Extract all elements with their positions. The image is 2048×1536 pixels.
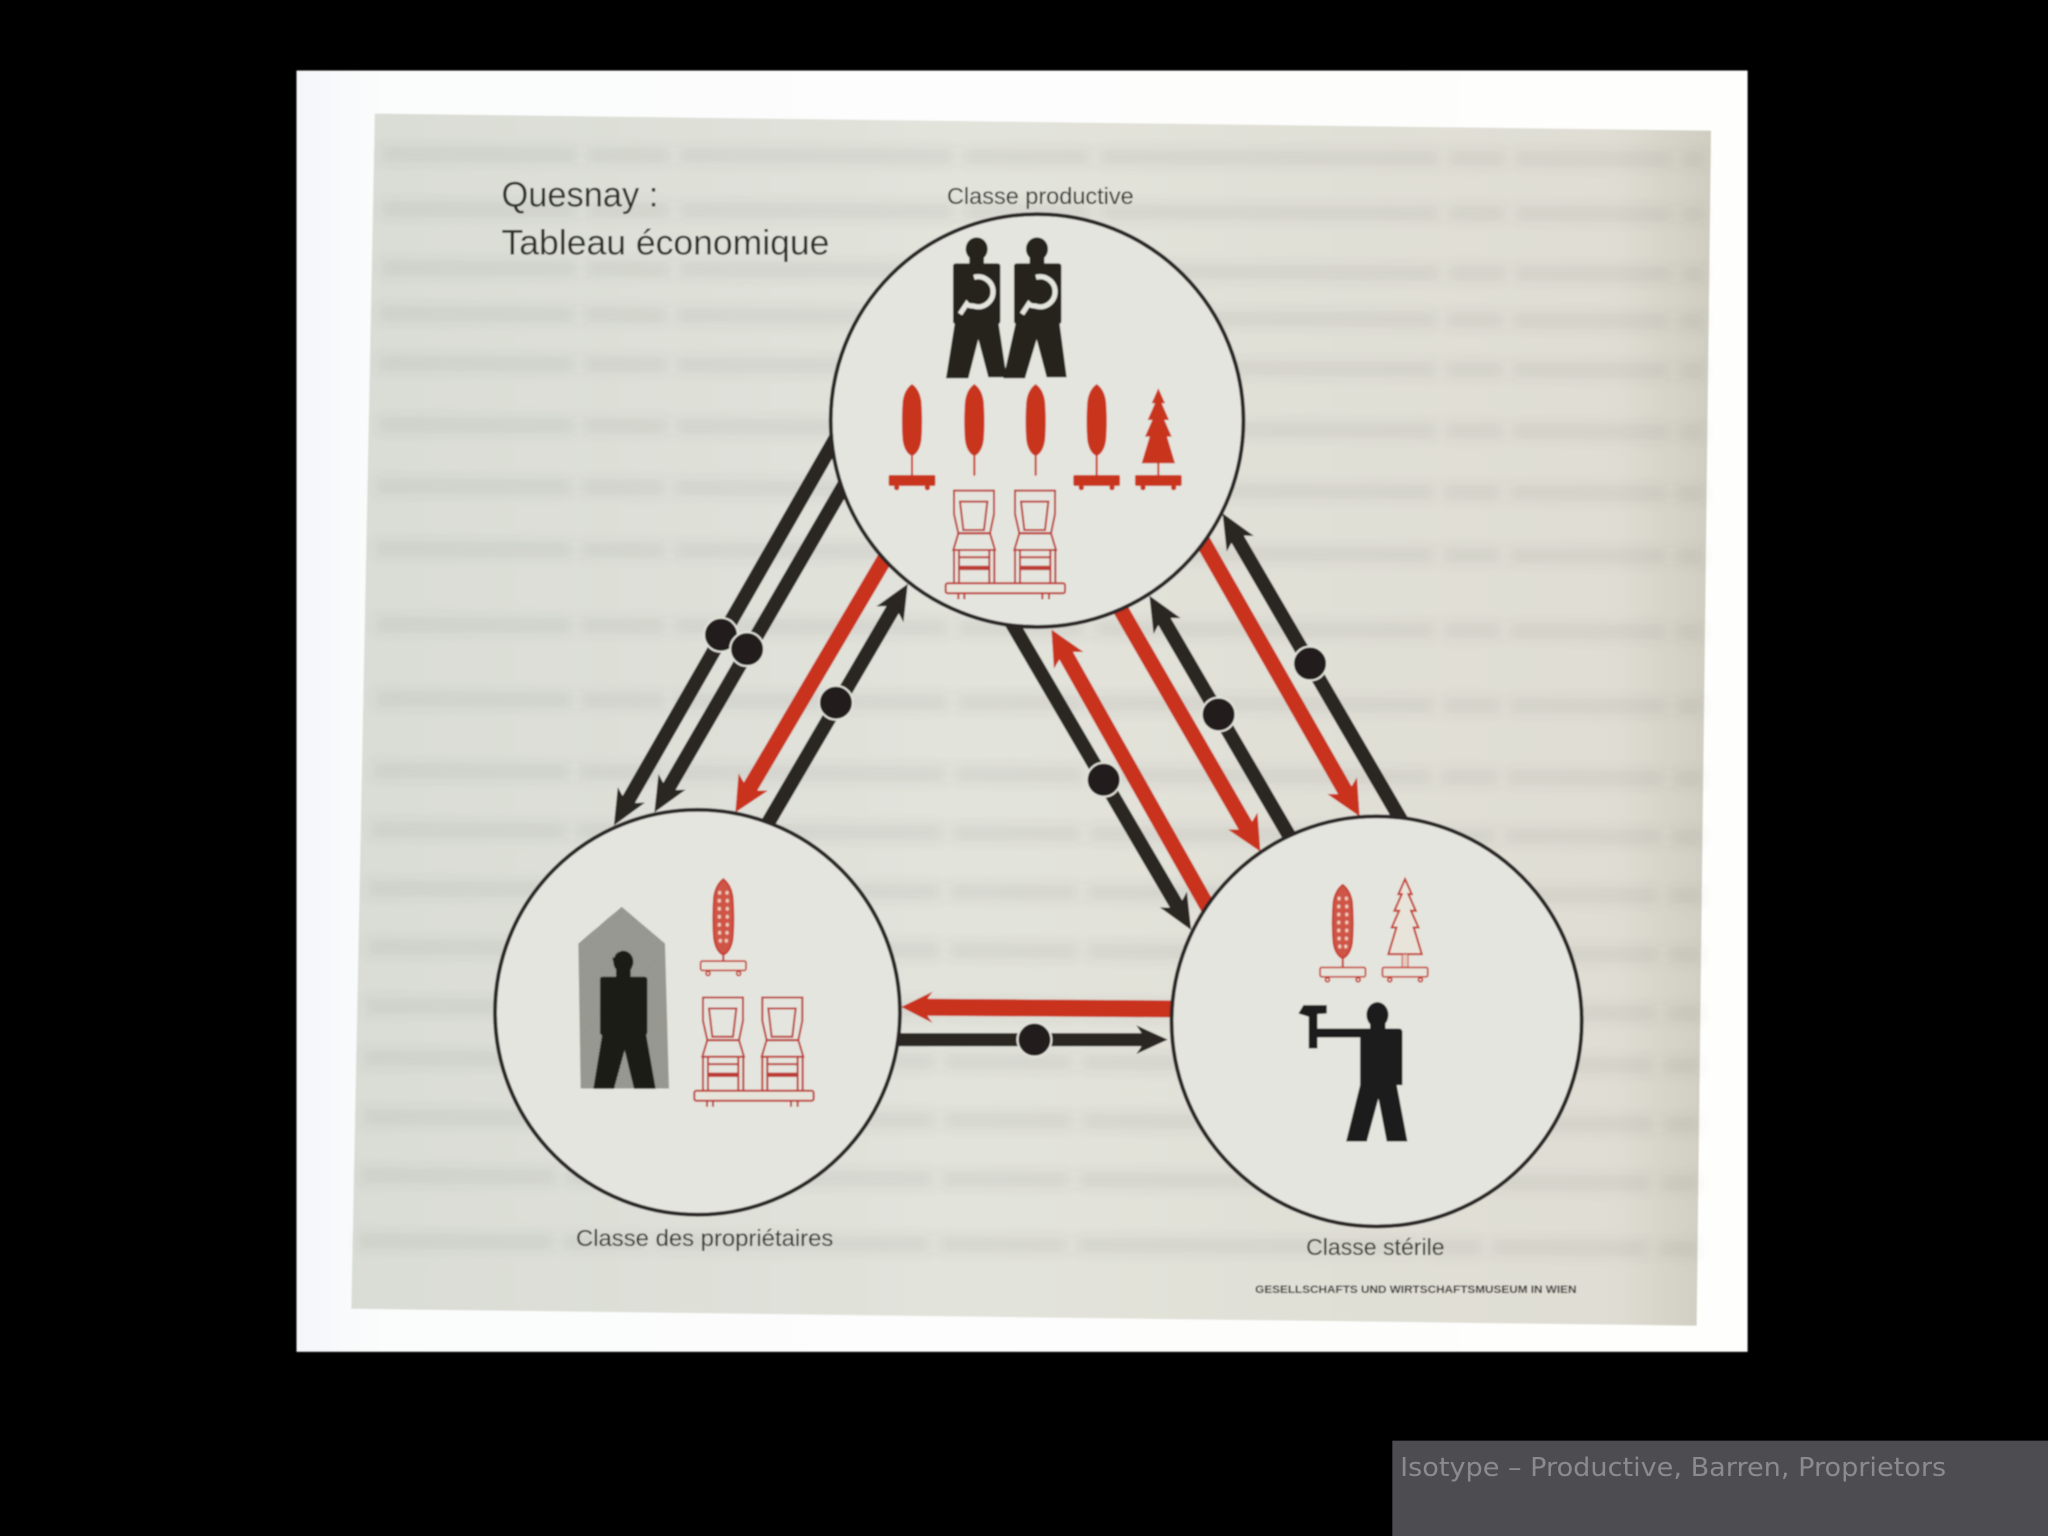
- icon: wheat outline: [701, 879, 746, 975]
- arrow: black flow to sterile: [893, 1025, 1168, 1054]
- icon: tree solid: [1135, 388, 1182, 490]
- label: classe stérile: Classe stérile: [1306, 1234, 1445, 1260]
- white frame of photo: [296, 71, 1748, 1352]
- label: classe productive: Classe productive: [947, 183, 1134, 209]
- show-through ghost text from reverse side: [358, 154, 1704, 1249]
- museum credit: GESELLSCHAFTS UND WIRTSCHAFTSMUSEUM IN WIEN: [1255, 1284, 1576, 1296]
- icon: wheat outline: [1320, 885, 1365, 982]
- title: Tableau économique: [502, 224, 829, 263]
- arrow: red flow to productive 1: [1037, 621, 1228, 925]
- coin marker 6: [1293, 647, 1327, 680]
- printed page: [351, 114, 1711, 1326]
- icon: wheat solid 1: [889, 384, 935, 490]
- icons: wheat, tree, artisan with hammer: [1298, 879, 1428, 1141]
- coin marker 3: [819, 686, 853, 720]
- icon: wheat solid 2: [964, 384, 984, 476]
- icon: chairs outlined on platform: [694, 997, 814, 1107]
- label: classe des propriétaires: Classe des propriétaires: [576, 1225, 833, 1251]
- icon: chairs outlined on platform: [946, 491, 1065, 599]
- panel: classe des propriétaires: [495, 810, 900, 1251]
- icons: proprietor in house, wheat, chairs: [578, 879, 814, 1107]
- icon: worker 1: [946, 237, 1007, 378]
- coin marker 5: [1202, 697, 1236, 731]
- panel: classe stérile: [1172, 816, 1582, 1260]
- photograph of the book page: [296, 71, 1748, 1352]
- arrow: black flow to sterile class 1: [996, 612, 1205, 938]
- arrow: black flow to productive class: [749, 576, 921, 840]
- icon: grey house: [578, 907, 669, 1088]
- caption text: Isotype – Productive, Barren, Proprietors: [1400, 1453, 1946, 1483]
- icon: tree outline: [1382, 879, 1428, 982]
- coin marker 7: [1017, 1023, 1051, 1057]
- flows: right side between productive and sterile: [996, 505, 1419, 938]
- arrow: black flow to productive 1: [1136, 588, 1306, 850]
- icon: proprietor figure: [593, 951, 656, 1089]
- arrow: red flow to sterile 1: [1101, 592, 1275, 860]
- title: [502, 175, 829, 263]
- coin marker 1: [704, 618, 738, 652]
- icons: two farm workers with sickles, wheat, tree, chairs: [889, 237, 1182, 599]
- coin marker 2: [730, 632, 764, 666]
- icon: worker 2: [1003, 237, 1067, 378]
- title: Quesnay :: [502, 175, 658, 214]
- caption bar: [1392, 1441, 2048, 1536]
- circle outline: [1172, 816, 1582, 1226]
- caption background: [1392, 1441, 2048, 1536]
- circle outline: [831, 214, 1243, 627]
- icon: artisan with hammer: [1298, 1002, 1407, 1141]
- flows: bottom between sterile and proprietors: [893, 991, 1176, 1057]
- icon: wheat solid 4: [1073, 384, 1120, 490]
- arrow: black flow to productive 2: [1209, 505, 1419, 835]
- circle outline: [495, 810, 900, 1215]
- arrow: red flow to proprietors: [901, 991, 1176, 1025]
- arrow: black money flow to proprietors 2: [641, 468, 863, 820]
- arrow: red goods flow to proprietors: [721, 540, 905, 821]
- icon: wheat solid 3: [1026, 384, 1046, 476]
- panel: classe productive: [831, 183, 1243, 627]
- coin marker 4: [1087, 763, 1121, 797]
- arrow: black money flow to proprietors 1: [600, 427, 851, 833]
- flows: left side between productive and proprietors: [600, 427, 921, 840]
- arrow: red flow to sterile 2: [1183, 524, 1374, 825]
